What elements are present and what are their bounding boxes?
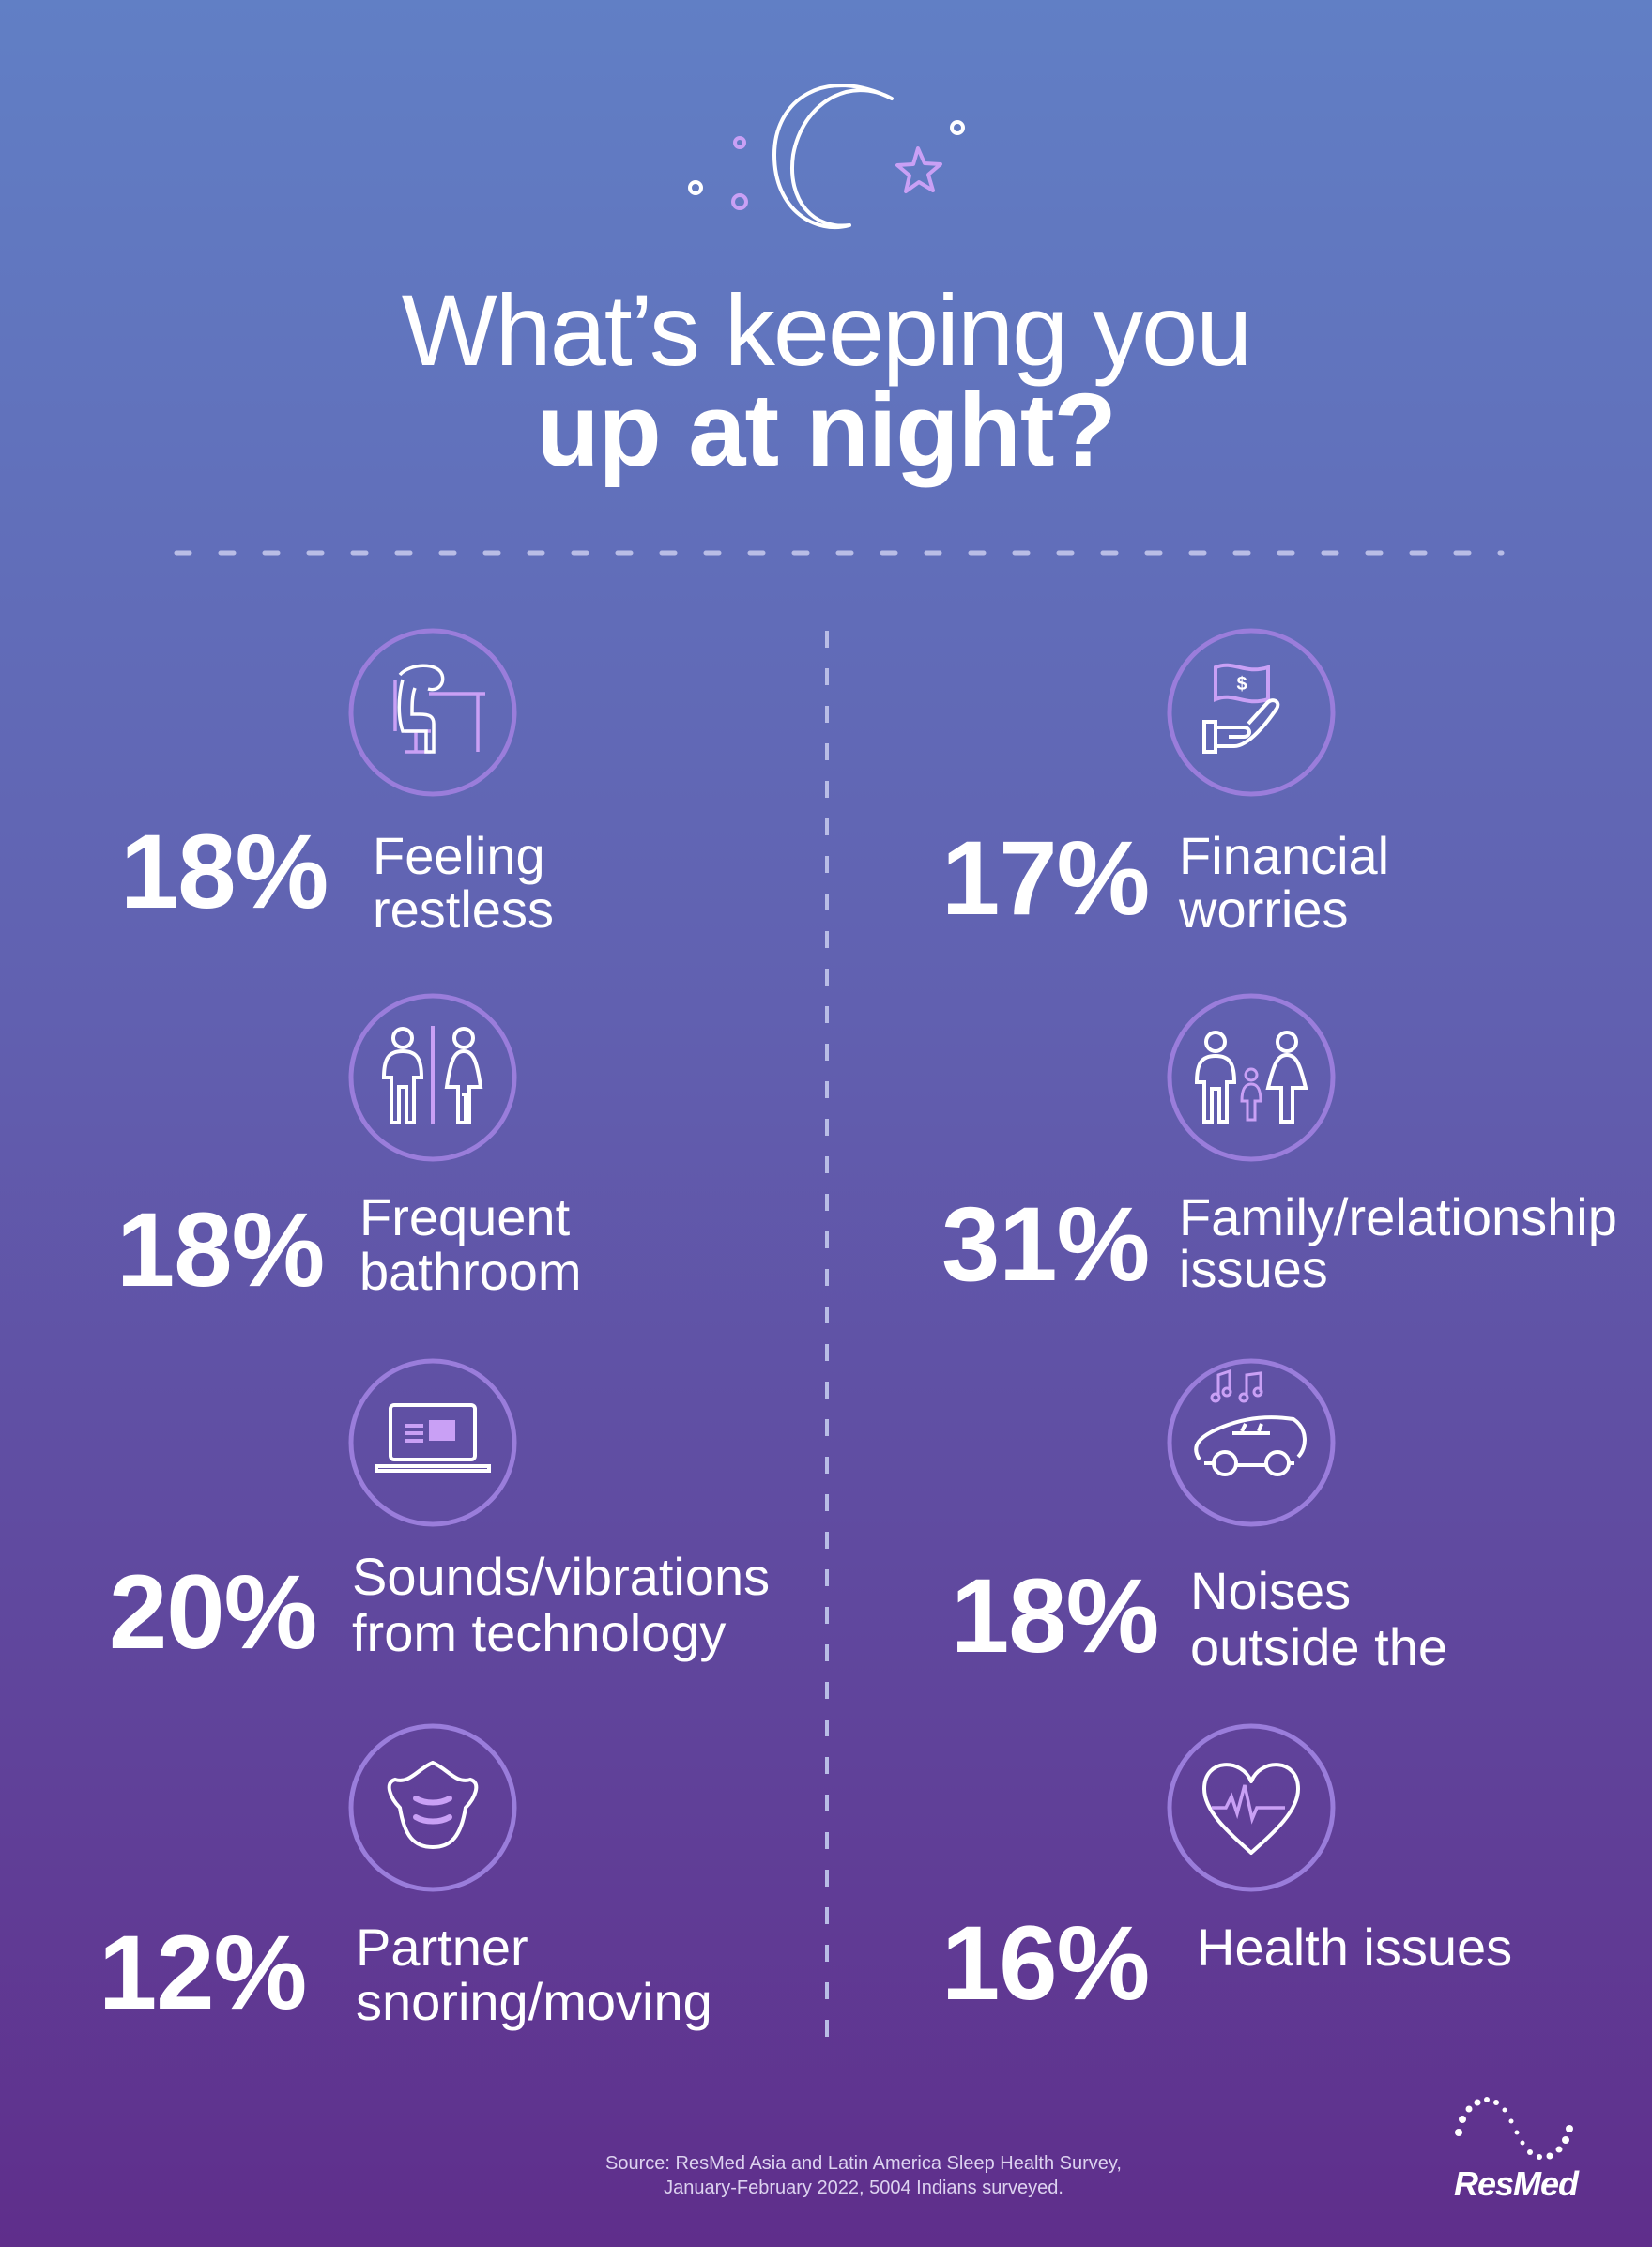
icon: bathroom [351,996,514,1159]
logo: ResMed [1454,2097,1580,2203]
stat: 18% noises outside: outside the [1190,1617,1447,1676]
stat: 31% family issues: 31% [941,1185,1149,1303]
icon: moon and stars [690,85,963,227]
stat: 20% sounds from technology: from technology [352,1603,726,1662]
stat: 18% noises outside: Noises [1190,1561,1351,1620]
stat: 18% feeling restless: 18% [120,813,328,930]
icon: car with music [1170,1361,1333,1524]
stat: 12% partner snoring: snoring/moving [356,1972,712,2031]
icon: person at desk (feeling restless) [351,631,514,794]
stat: 20% sounds from technology: Sounds/vibrations [352,1547,770,1606]
stat: 12% partner snoring [99,1914,712,2031]
stat: 18% feeling restless: restless [373,879,554,939]
stat: 31% family issues: issues [1179,1239,1328,1298]
stat: 17% financial worries [941,819,1389,939]
icon: laptop [351,1361,514,1524]
icon: money in hand: $ [1236,674,1247,695]
icon: family [1170,996,1333,1159]
stat: 16% health issues: Health issues [1197,1918,1512,1977]
stat: 18% frequent bathroom: bathroom [359,1242,582,1301]
icon: money in hand [1170,631,1333,794]
icon: heart pulse [1170,1726,1333,1889]
stat: 18% frequent bathroom [116,1187,582,1308]
source text [605,2153,1122,2198]
stat: 18% frequent bathroom: Frequent [359,1187,571,1246]
stat: 18% feeling restless: Feeling [373,826,545,885]
icon: mask [351,1726,514,1889]
title: What’s keeping you [402,273,1250,387]
title: up at night? [536,373,1116,488]
stat: 18% feeling restless [120,813,554,939]
title [402,273,1250,488]
stat: 17% financial worries: 17% [941,819,1149,937]
stat: 18% frequent bathroom: 18% [116,1191,324,1308]
stat: 18% noises outside: 18% [951,1557,1158,1674]
stat: 17% financial worries: Financial [1179,826,1389,885]
source text: January-February 2022, 5004 Indians surveyed. [664,2178,1063,2198]
stat: 31% family issues [941,1185,1617,1303]
logo: ResMed: ResMed [1454,2164,1580,2203]
stat: 20% sounds from technology: 20% [109,1553,316,1671]
stat: 16% health issues [941,1904,1512,2022]
stat: 12% partner snoring: Partner [356,1918,528,1977]
stat: 18% noises outside [951,1557,1447,1676]
stat: 16% health issues: 16% [941,1904,1149,2022]
stat: 20% sounds from technology [109,1547,770,1671]
source text: Source: ResMed Asia and Latin America Sleep Health Survey, [605,2153,1122,2174]
stat: 31% family issues: Family/relationship [1179,1187,1617,1246]
stat: 17% financial worries: worries [1178,879,1348,939]
stat: 12% partner snoring: 12% [99,1914,306,2031]
